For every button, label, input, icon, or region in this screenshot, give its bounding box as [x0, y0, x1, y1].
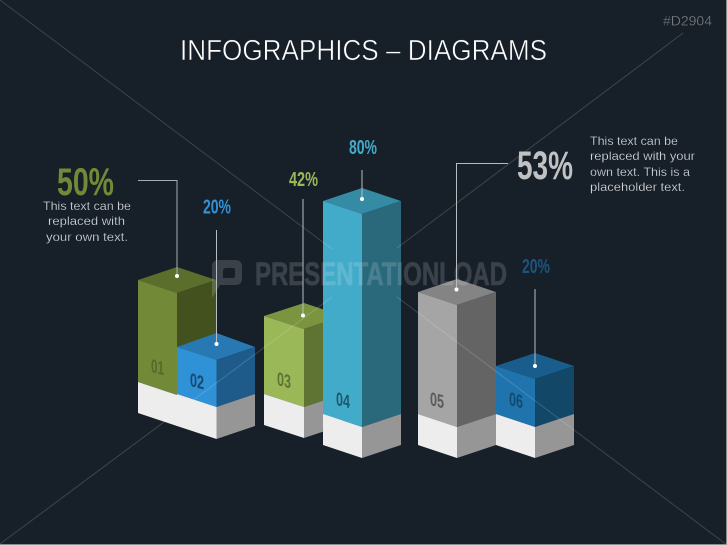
bar 06	[496, 353, 574, 458]
callout: 53%: This text can be	[590, 134, 678, 148]
watermark	[212, 256, 507, 298]
callout: 53%	[454, 134, 695, 292]
bar number 05: 05	[430, 389, 444, 413]
bar 01	[138, 267, 216, 426]
title: INFOGRAPHICS – DIAGRAMS	[180, 35, 547, 67]
reference code: #D2904	[663, 14, 713, 28]
callout: 50%: This text can be	[43, 199, 131, 213]
bar number 03: 03	[277, 369, 291, 393]
callout: 53%: placeholder text.	[590, 180, 685, 194]
watermark text: PRESENTATIONLOAD	[255, 256, 507, 292]
callout: 20% dark blue: 20%	[522, 256, 550, 278]
callout: 20% dark blue	[522, 256, 550, 368]
bar 03	[264, 303, 343, 438]
bar 05	[418, 279, 496, 458]
bar 02	[177, 333, 255, 439]
callout: 80%: 80%	[349, 137, 377, 159]
bar 04	[323, 188, 401, 458]
callout: 53%: replaced with your	[590, 149, 695, 163]
callout: 42%: 42%	[289, 169, 318, 191]
callout: 20% blue: 20%	[203, 196, 231, 218]
callout: 50%: your own text.	[46, 230, 128, 244]
callout: 80%	[349, 137, 377, 201]
bar number 02: 02	[190, 370, 204, 394]
callout: 50%: 50%	[57, 161, 114, 204]
callout: 50%	[43, 161, 179, 278]
watermark icon	[212, 260, 242, 298]
callout: 53%: 53%	[517, 144, 573, 188]
callout: 53%: own text. This is a	[590, 165, 690, 179]
bar number 01: 01	[151, 356, 164, 380]
callout: 20% blue	[203, 196, 231, 346]
bar number 06: 06	[509, 389, 523, 413]
callout: 42%	[289, 169, 318, 318]
bar number 04: 04	[336, 389, 350, 413]
callout: 50%: replaced with	[48, 214, 125, 228]
